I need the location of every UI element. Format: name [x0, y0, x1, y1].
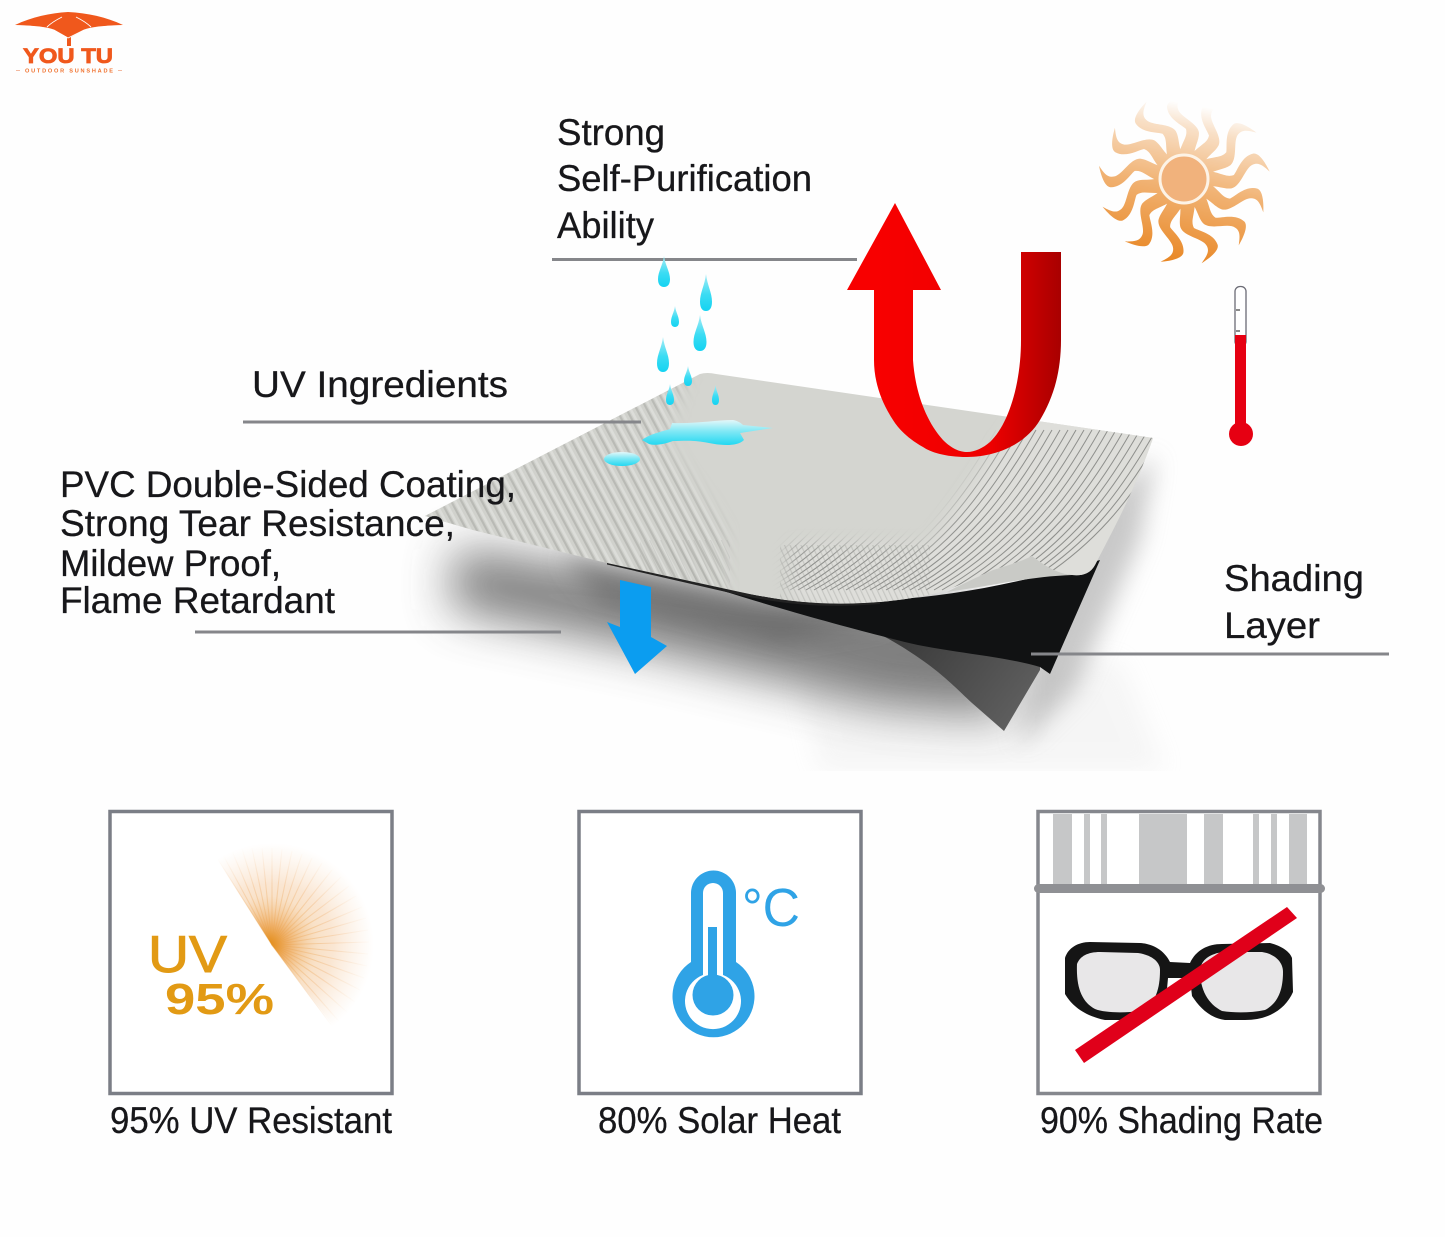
label: UV ingredients: UV Ingredients — [252, 364, 508, 405]
caption: solar heat: 80% Solar Heat — [598, 1100, 842, 1141]
label: PVC coating: Strong Tear Resistance, — [60, 503, 455, 544]
icon: sun — [1097, 93, 1271, 267]
logo: YOU TU outdoor sunshade — [15, 12, 123, 74]
shade slats — [1053, 814, 1307, 884]
caption: UV resistant: 95% UV Resistant — [110, 1100, 393, 1141]
fabric top sheet — [420, 370, 1172, 615]
label: self-purification: Strong — [557, 112, 665, 153]
red strike — [1075, 907, 1297, 1063]
label: shading layer: Shading — [1224, 558, 1364, 599]
panel: solar heat — [579, 812, 861, 1094]
shade rail — [1034, 884, 1325, 893]
leader lines — [195, 260, 1389, 654]
UV 95% text: UV — [148, 926, 227, 984]
label: self-purification — [557, 112, 812, 246]
water drops — [657, 256, 719, 405]
fabric right ribbing — [780, 422, 1152, 604]
icon: crossed glasses — [1065, 907, 1297, 1063]
caption: shading rate: 90% Shading Rate — [1040, 1100, 1323, 1141]
panel: UV resistant: 95% — [165, 975, 274, 1024]
panel: UV resistant — [110, 812, 392, 1094]
fabric curled corner — [947, 556, 1072, 592]
degrees celsius: °C — [742, 878, 800, 938]
tight shadow under sheet — [560, 555, 900, 640]
icon: canopy — [15, 12, 123, 46]
bottom dark layer — [884, 636, 1040, 731]
water puddle — [642, 420, 773, 445]
label: PVC coating — [60, 464, 516, 621]
fabric layers illustration — [420, 370, 1172, 771]
right shadow — [1020, 455, 1155, 745]
label: PVC coating: Flame Retardant — [60, 580, 336, 621]
fabric edge underside — [607, 563, 880, 606]
black shading layer — [720, 560, 1100, 674]
label: shading layer: Layer — [1224, 605, 1320, 646]
label: PVC coating: Mildew Proof, — [60, 543, 281, 584]
icon: blue thermometer — [672, 870, 754, 1037]
label: self-purification: Ability — [557, 205, 654, 246]
panel: shading rate — [1034, 812, 1325, 1094]
icon: red thermometer — [1229, 286, 1253, 446]
icon: UV burst — [215, 835, 387, 1035]
faint floor shadow — [834, 684, 1130, 750]
blue downward arrow — [607, 580, 667, 674]
logo wordmark: YOU TU — [23, 45, 113, 68]
red reflection arrow — [847, 203, 1061, 457]
label: self-purification: Self-Purification — [557, 158, 812, 199]
soft shadow — [450, 548, 1005, 715]
label: shading layer — [1224, 558, 1364, 646]
small water puddle — [604, 452, 640, 466]
logo tagline: OUTDOOR SUNSHADE — [25, 68, 113, 74]
label: PVC coating: PVC Double-Sided Coating, — [60, 464, 516, 505]
